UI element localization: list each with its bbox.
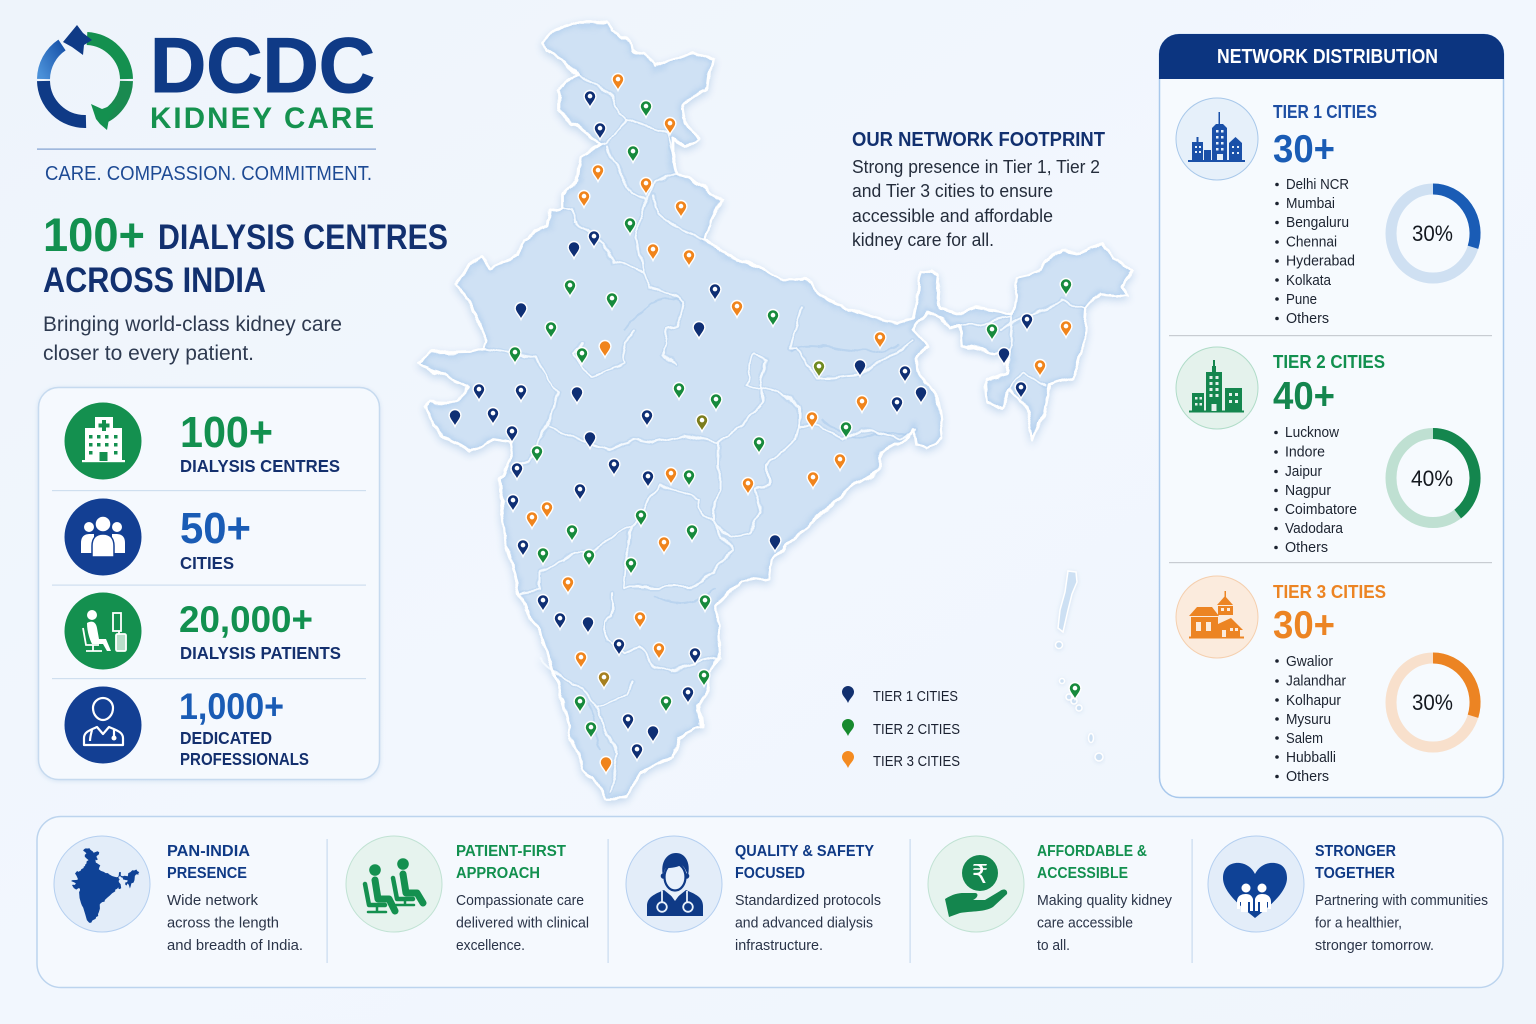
feature: stronger together: STRONGER: [1315, 843, 1396, 860]
feature: affordable and accessible: [928, 836, 1172, 954]
feature: patient-first approach: excellence.: [456, 937, 525, 954]
icon: tier 1 skyline: [1176, 98, 1258, 180]
state borders: [487, 75, 1087, 790]
list: tier 1 cities: Kolkata: [1286, 273, 1332, 289]
stat: dedicated professionals: PROFESSIONALS: [180, 749, 309, 769]
legend item: tier 1: TIER 1 CITIES: [873, 689, 958, 705]
subtitle: Bringing world-class kidney care: [43, 313, 342, 336]
icon: recycling care ring: [44, 25, 126, 130]
text block: our network footprint: kidney care for all.: [852, 230, 994, 250]
icon: rupee coin on hand: [928, 836, 1024, 932]
list: tier 1 cities: Pune: [1286, 292, 1317, 308]
icon: doctor: [64, 686, 142, 764]
list: tier 2 cities: Others: [1285, 540, 1328, 556]
tier 1 section: TIER 1 CITIES: [1273, 102, 1377, 122]
stat: dedicated professionals: 1,000+: [179, 686, 284, 727]
tier 3 section: TIER 3 CITIES: [1273, 582, 1386, 602]
list: tier 3 cities: Hubballi: [1286, 750, 1336, 766]
tier 1 section: 30+: [1273, 128, 1335, 171]
wordmark Kidney Care: KIDNEY CARE: [150, 102, 374, 135]
panel: network distribution: [1159, 34, 1504, 798]
headline: DIALYSIS CENTRES: [158, 218, 448, 257]
donut chart: 30%: 30%: [1412, 221, 1453, 246]
stat: dedicated professionals: DEDICATED: [180, 728, 272, 748]
stat: cities: CITIES: [180, 553, 234, 573]
tier 2 section: [1176, 347, 1475, 556]
list: tier 1 cities: Chennai: [1286, 234, 1337, 250]
panel header: NETWORK DISTRIBUTION: [1217, 46, 1438, 68]
islands: [1056, 571, 1103, 761]
list: tier 1 cities: Others: [1286, 311, 1329, 327]
list: tier 2 cities: [1274, 425, 1357, 556]
map pins: tier 2 cities: [509, 100, 1081, 738]
subtitle: closer to every patient.: [43, 342, 254, 365]
stat: dialysis patients: 20,000+: [179, 599, 313, 640]
tier 3 section: 30+: [1273, 604, 1335, 647]
headline: [43, 208, 448, 300]
icon: rupee coin on hand: ₹: [972, 859, 988, 889]
stat: dialysis centres: [64, 402, 340, 480]
donut chart: 30%: 30%: [1412, 690, 1453, 715]
tier 2 section: TIER 2 CITIES: [1273, 352, 1385, 372]
tier 2 section: 40+: [1273, 375, 1335, 418]
text block: our network footprint: and Tier 3 cities to ensure: [852, 181, 1053, 201]
stat: cities: 50+: [180, 504, 251, 553]
list: tier 2 cities: Nagpur: [1285, 483, 1331, 499]
donut chart: 30%: [1391, 658, 1475, 747]
feature: quality and safety focused: FOCUSED: [735, 865, 805, 882]
panel header: [1159, 34, 1504, 79]
feature: quality and safety focused: Standardized protocols: [735, 892, 881, 909]
icon: heart with family: [1208, 836, 1304, 932]
feature: affordable and accessible: AFFORDABLE &: [1037, 843, 1147, 860]
tier 1 section: [1176, 98, 1475, 327]
icon: doctor with stethoscope: [626, 836, 722, 932]
list: tier 2 cities: Lucknow: [1285, 425, 1339, 441]
list: tier 1 cities: Hyderabad: [1286, 254, 1355, 270]
text block: our network footprint: accessible and affordable: [852, 206, 1053, 226]
feature: pan-india presence: and breadth of India.: [167, 937, 303, 954]
donut chart: 40%: [1391, 434, 1475, 522]
list: tier 1 cities: Mumbai: [1286, 196, 1335, 212]
feature: patient-first approach: delivered with clinical: [456, 914, 589, 932]
stat: dialysis patients: DIALYSIS PATIENTS: [180, 643, 341, 663]
feature: patient-first approach: APPROACH: [456, 865, 540, 882]
list: tier 2 cities: Jaipur: [1285, 464, 1322, 480]
stat: dialysis centres: 100+: [180, 408, 273, 457]
feature: pan-india presence: PAN-INDIA: [167, 843, 250, 860]
list: tier 3 cities: Salem: [1286, 731, 1323, 747]
feature: affordable and accessible: care accessible: [1037, 914, 1133, 932]
text block: our network footprint: Strong presence in Tier 1, Tier 2: [852, 157, 1100, 177]
panel: key statistics: [38, 388, 380, 780]
map pins: tier 1 cities: [449, 90, 1033, 760]
feature: quality and safety focused: [626, 836, 881, 954]
icon: seated patients: [346, 836, 442, 932]
icon: patient on dialysis machine: [64, 592, 142, 670]
icon: people group: [64, 498, 142, 576]
list: tier 1 cities: Bengaluru: [1286, 215, 1349, 231]
feature: stronger together: TOGETHER: [1315, 865, 1395, 882]
map coastline: [415, 19, 1133, 797]
feature: affordable and accessible: ACCESSIBLE: [1037, 865, 1128, 882]
feature: affordable and accessible: Making quality kidney: [1037, 892, 1172, 909]
headline: 100+: [43, 208, 145, 261]
list: tier 3 cities: Gwalior: [1286, 654, 1333, 670]
feature: pan-india presence: across the length: [167, 914, 279, 932]
tagline: CARE. COMPASSION. COMMITMENT.: [45, 163, 372, 185]
feature: stronger together: [1208, 836, 1488, 954]
feature: affordable and accessible: to all.: [1037, 937, 1070, 954]
list: tier 3 cities: Kolhapur: [1286, 693, 1341, 709]
subtitle: [43, 313, 342, 365]
list: tier 2 cities: Indore: [1285, 444, 1325, 460]
feature: quality and safety focused: infrastructure.: [735, 937, 823, 954]
panel: bottom features strip: [37, 816, 1503, 988]
feature: patient-first approach: PATIENT-FIRST: [456, 843, 566, 860]
list: tier 2 cities: Coimbatore: [1285, 502, 1357, 518]
text block: our network footprint: OUR NETWORK FOOTPRINT: [852, 129, 1105, 151]
text block: our network footprint: [852, 129, 1105, 250]
map pins: tier 3 cities: [526, 74, 1072, 774]
stat: dialysis centres: DIALYSIS CENTRES: [180, 456, 340, 476]
stat: dialysis patients: [64, 592, 341, 670]
list: tier 3 cities: [1275, 654, 1346, 785]
feature: pan-india presence: [54, 836, 303, 954]
feature: pan-india presence: Wide network: [167, 892, 258, 909]
logo: [44, 21, 375, 135]
list: tier 3 cities: Others: [1286, 769, 1329, 785]
icon: tier 2 buildings: [1176, 347, 1258, 429]
donut chart: 30%: [1391, 189, 1475, 278]
icon: tier 3 town houses: [1176, 576, 1258, 658]
stat: dedicated professionals: [64, 686, 309, 769]
list: tier 2 cities: Vadodara: [1285, 521, 1344, 537]
feature: stronger together: Partnering with communities: [1315, 892, 1488, 909]
donut chart: 40%: 40%: [1411, 466, 1453, 491]
feature: patient-first approach: [346, 836, 589, 954]
feature: patient-first approach: Compassionate care: [456, 892, 584, 909]
feature: stronger together: for a healthier,: [1315, 914, 1402, 932]
list: tier 1 cities: [1275, 177, 1355, 327]
legend: [842, 686, 960, 770]
feature: pan-india presence: PRESENCE: [167, 865, 247, 882]
icon: hospital: [64, 402, 142, 480]
legend item: tier 3: TIER 3 CITIES: [873, 754, 960, 770]
legend item: tier 2: TIER 2 CITIES: [873, 722, 960, 738]
list: tier 1 cities: Delhi NCR: [1286, 177, 1349, 193]
headline: ACROSS INDIA: [43, 261, 266, 300]
list: tier 3 cities: Mysuru: [1286, 712, 1331, 728]
map: India with state borders: [415, 19, 1133, 797]
stat: cities: [64, 498, 251, 576]
wordmark DCDC: DCDC: [150, 21, 375, 109]
map coastal shading: [415, 19, 1133, 797]
feature: quality and safety focused: QUALITY & SAFETY: [735, 843, 874, 860]
tier 3 section: [1176, 576, 1475, 785]
icon: India silhouette: [54, 836, 150, 932]
feature: quality and safety focused: and advanced dialysis: [735, 914, 873, 932]
feature: stronger together: stronger tomorrow.: [1315, 937, 1434, 954]
map landmass: [415, 19, 1133, 797]
list: tier 3 cities: Jalandhar: [1286, 674, 1346, 690]
